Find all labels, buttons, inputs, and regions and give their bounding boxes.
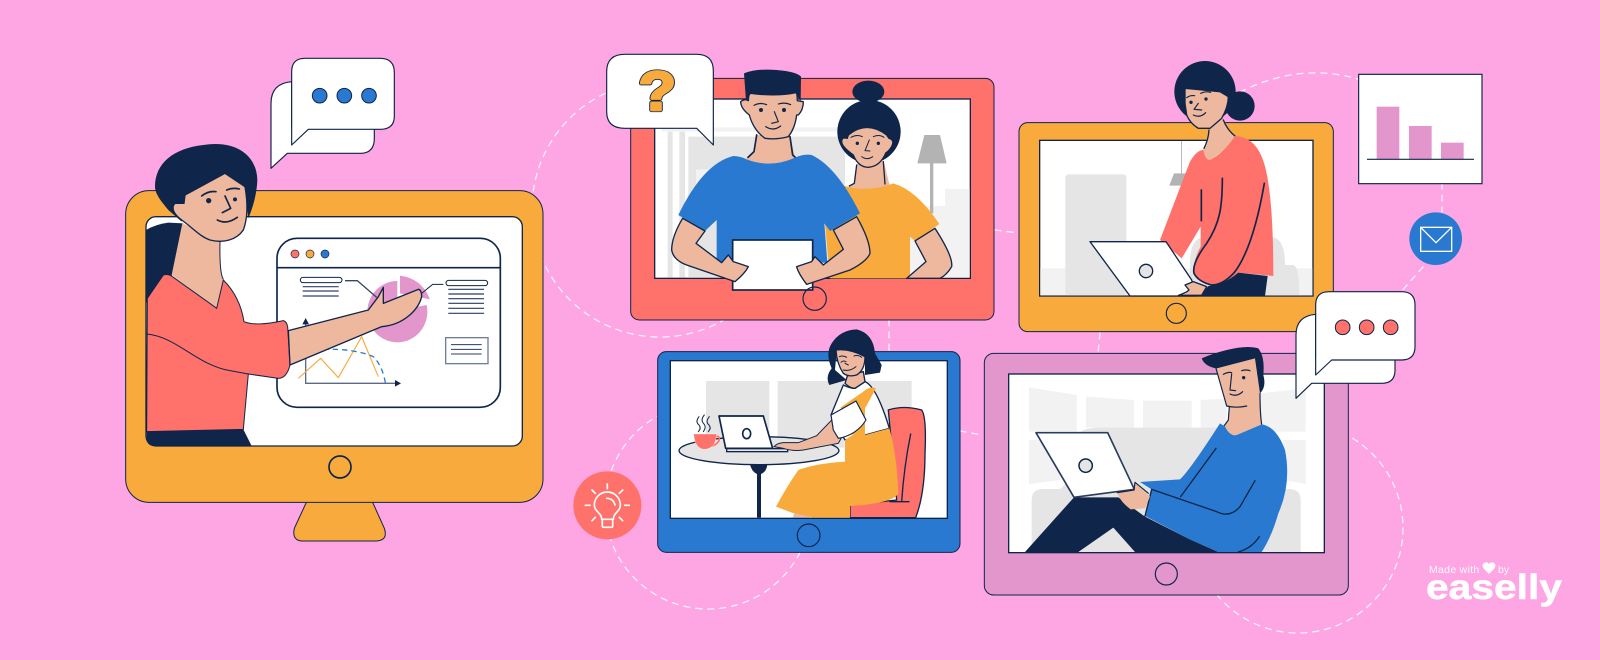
tablet screen — [670, 361, 947, 518]
seated woman in orange dress — [774, 329, 898, 518]
monitor power button — [329, 456, 351, 478]
icon: lightbulb — [573, 471, 641, 539]
pink tablet frame — [984, 353, 1348, 595]
panel: man with laptop on pink tablet — [984, 292, 1415, 595]
panel: woman with laptop on orange tablet — [1019, 61, 1482, 332]
speech bubbles with three dots — [271, 58, 394, 168]
laptop on table — [719, 416, 788, 452]
browser window with charts — [277, 238, 500, 407]
room background — [706, 381, 912, 448]
easelly watermark: easelly — [1426, 568, 1563, 607]
easelly watermark: Made with — [1429, 564, 1480, 576]
tablet screen — [1009, 374, 1324, 553]
monitor frame — [126, 191, 543, 502]
question mark speech bubble — [607, 54, 713, 145]
tablet screen — [655, 99, 970, 278]
monitor stand — [294, 502, 385, 541]
steaming coffee cup — [694, 415, 719, 449]
speech bubbles with three dots — [1296, 292, 1415, 398]
orange tablet frame — [1019, 123, 1333, 332]
question mark speech bubble: ? — [639, 61, 676, 122]
room background — [1029, 387, 1306, 552]
woman with hair bun — [825, 81, 952, 278]
monitor screen — [146, 217, 522, 446]
panel: couple on coral tablet — [607, 54, 994, 320]
round table — [679, 437, 839, 518]
tablet home button — [797, 524, 820, 547]
seated man in blue sweater — [1025, 347, 1287, 552]
panel: presenter on desktop monitor — [126, 58, 543, 541]
blue tablet frame — [658, 352, 960, 552]
bar chart card — [1359, 74, 1482, 184]
coral tablet frame — [631, 78, 994, 320]
panel: woman at cafe table on blue tablet — [573, 329, 960, 552]
room background — [662, 127, 970, 278]
man in blue t-shirt — [672, 70, 870, 290]
tablet home button — [1166, 303, 1186, 323]
room background — [1040, 141, 1312, 295]
coral chair — [850, 407, 925, 518]
tablet home button — [803, 287, 826, 310]
easelly watermark: by — [1498, 564, 1510, 576]
tablet screen — [1040, 140, 1313, 296]
question mark speech bubble: ? — [639, 61, 676, 122]
icon: mail envelope — [1409, 212, 1462, 265]
standing woman in coral sweater — [1090, 61, 1273, 296]
tablet home button — [1155, 563, 1177, 585]
presenter woman — [146, 144, 422, 446]
